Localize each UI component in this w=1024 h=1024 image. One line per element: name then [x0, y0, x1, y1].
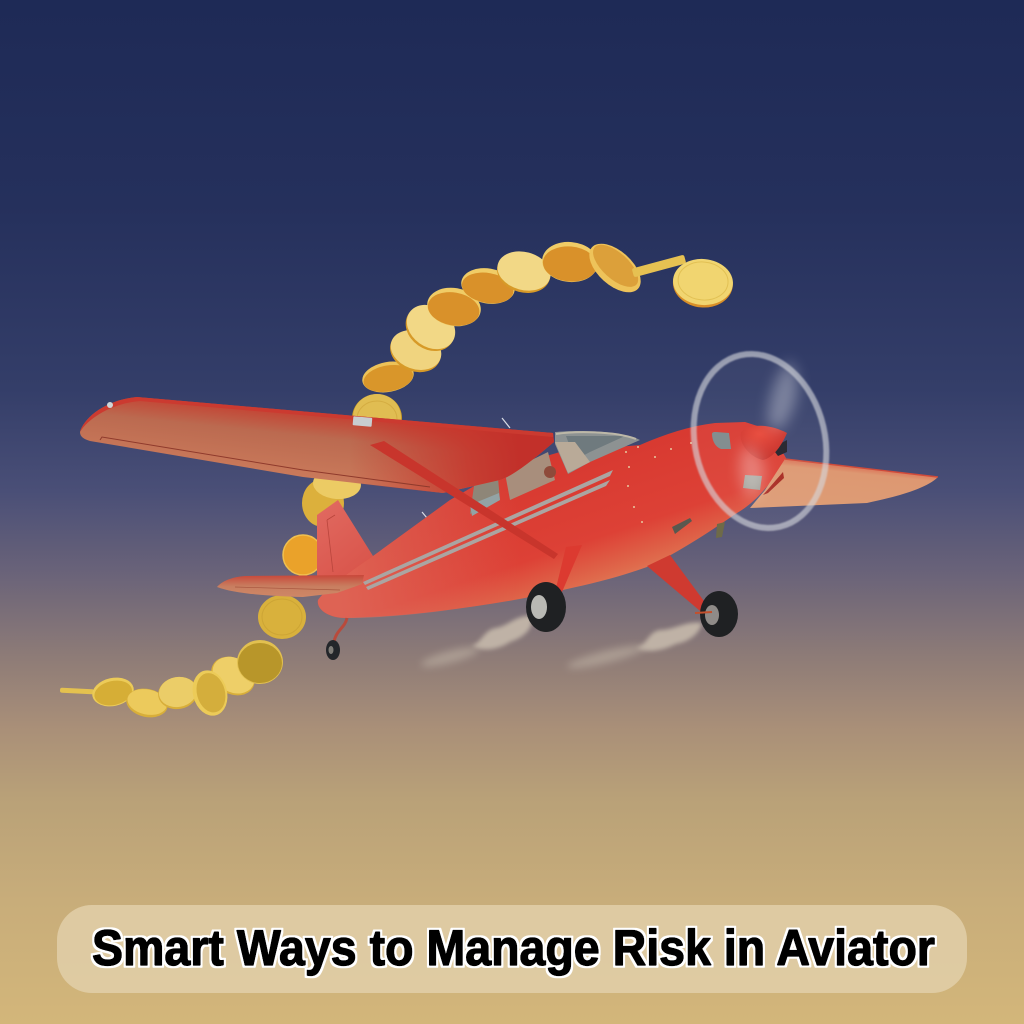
- coin: [352, 394, 402, 442]
- title text: Smart Ways to Manage Risk in Aviator: [92, 920, 935, 976]
- coin: edge-on: [632, 255, 686, 277]
- coin: [237, 640, 283, 684]
- rivets: [625, 442, 692, 523]
- tail fin: [317, 500, 373, 582]
- coin: [492, 246, 555, 299]
- wing strut: [370, 441, 558, 559]
- fuselage stripes: [363, 470, 613, 590]
- coin: [156, 674, 200, 712]
- propeller spinner: [741, 426, 787, 460]
- tail wheel: [326, 618, 347, 660]
- coin: [424, 284, 484, 330]
- coin: [458, 264, 518, 308]
- coin: [124, 685, 170, 721]
- coin trail: upper arc: [352, 235, 735, 442]
- windshield: [555, 431, 640, 474]
- coin: [90, 674, 136, 710]
- coin: [397, 296, 464, 360]
- propeller blur: [677, 341, 843, 541]
- coin: [360, 358, 416, 396]
- right wing: [750, 459, 938, 508]
- main landing gear: [526, 545, 738, 637]
- title pill: [57, 905, 967, 993]
- smoke trails: [419, 616, 702, 672]
- coin: [312, 467, 362, 501]
- coin: [283, 535, 323, 575]
- antenna: [422, 418, 510, 518]
- wheel: [695, 591, 738, 637]
- coin: [581, 235, 649, 301]
- fuselage: [318, 422, 786, 618]
- cabin side windows: [470, 442, 590, 516]
- cowling details: [672, 432, 787, 538]
- airplane: [80, 341, 938, 660]
- coin: [188, 666, 232, 720]
- horizontal stabilizer: [217, 575, 364, 597]
- coin: [540, 240, 600, 284]
- coin: [671, 256, 735, 310]
- coin trail: lower arc: [60, 467, 362, 721]
- coin: edge-on: [60, 688, 94, 694]
- coin: [384, 323, 447, 379]
- coin: [258, 595, 306, 639]
- coin: [302, 479, 344, 527]
- wheel: [526, 582, 566, 632]
- coin: [204, 649, 262, 703]
- main wing: [80, 397, 554, 493]
